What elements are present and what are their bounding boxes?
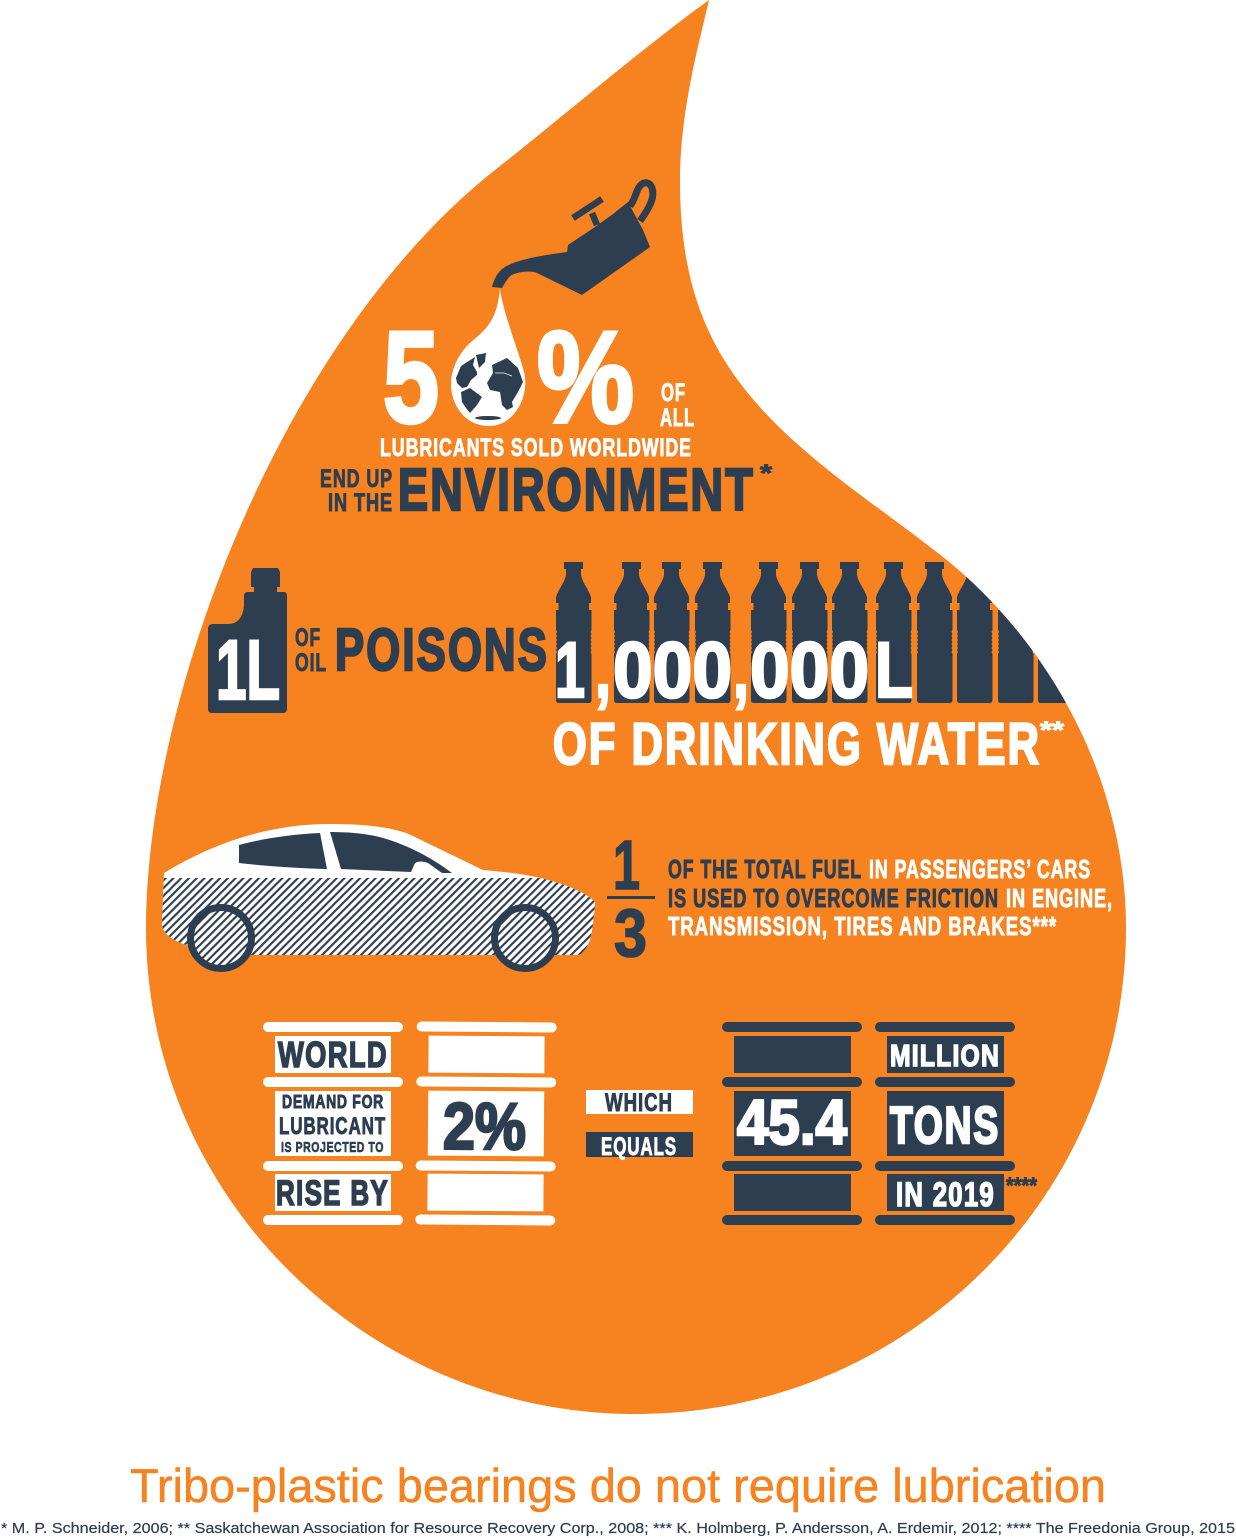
references footnote: * M. P. Schneider, 2006; ** Saskatchewan Association for Resource Recovery Corp., 2008; *** K. Holmberg, P. Andersson, A. Erdemir, 2012; **** The Freedonia Group, 2015 [1, 1520, 1235, 1537]
end up in the: IN THE [328, 489, 393, 517]
barrel: world demand [263, 1022, 403, 1225]
one million litres: L [875, 625, 913, 714]
barrel: world demand: WORLD [278, 1034, 388, 1075]
barrel: world demand: DEMAND FOR [282, 1092, 384, 1112]
equals label: EQUALS [601, 1133, 677, 1161]
percent sign: % [537, 304, 634, 450]
fraction one third: 3 [614, 895, 647, 971]
of drinking water: OF DRINKING WATER [553, 712, 1041, 777]
poisons: POISONS [335, 617, 549, 683]
barrel: million tons in 2019: TONS [890, 1097, 1000, 1155]
barrel: two percent [415, 1022, 557, 1225]
fuel friction text: IS USED TO OVERCOME FRICTION [668, 883, 999, 913]
footnote mark: * [760, 460, 773, 487]
fuel friction text [668, 854, 1113, 941]
barrel: two percent: 2% [443, 1089, 526, 1163]
panel: lubricant demand barrels [263, 1022, 1037, 1225]
bottles row [556, 562, 1074, 703]
one million litres: 000 [613, 625, 732, 714]
one litre: 1L [216, 623, 280, 717]
of oil: OIL [295, 649, 327, 677]
panel: one third of fuel [150, 824, 1113, 971]
fraction one third: 1 [613, 826, 640, 904]
icon: car [150, 824, 610, 968]
of all: ALL [660, 404, 695, 432]
icon: oil jug [208, 568, 287, 713]
fuel friction text: TRANSMISSION, TIRES AND BRAKES*** [668, 911, 1057, 941]
number five: 5 [383, 304, 439, 450]
barrel: 45.4: 45.4 [737, 1088, 847, 1158]
one million litres: 000 [750, 625, 869, 714]
barrel: world demand: LUBRICANT [279, 1113, 386, 1140]
barrel: world demand: RISE BY [276, 1174, 389, 1213]
one million litres: , [595, 625, 611, 714]
of all: OF [661, 379, 686, 407]
fraction one third [607, 826, 655, 971]
one million litres: 1 [555, 625, 585, 714]
end up in the [320, 465, 393, 517]
one million litres [555, 625, 913, 714]
fuel friction text: OF THE TOTAL FUEL [668, 854, 862, 884]
of oil: OF [295, 624, 321, 652]
of all [660, 379, 695, 432]
end up in the: END UP [320, 465, 393, 493]
icon: white drop with globe [451, 288, 525, 426]
environment: ENVIRONMENT [398, 457, 755, 523]
icon: oil can [492, 183, 653, 295]
lubricants sold worldwide: LUBRICANTS SOLD WORLDWIDE [380, 434, 692, 462]
which label: WHICH [605, 1089, 673, 1117]
fuel friction text: IN ENGINE, [1006, 883, 1113, 913]
barrel: million tons in 2019 [875, 1022, 1037, 1225]
barrel: world demand: IS PROJECTED TO [281, 1139, 384, 1156]
one million litres: , [733, 625, 749, 714]
of oil [295, 624, 327, 677]
fuel friction text: IN PASSENGERS’ CARS [869, 854, 1091, 884]
orange oil drop background [146, 0, 1126, 1414]
panel: one litre poisons a million [208, 562, 1074, 777]
barrel: million tons in 2019: IN 2019 [896, 1176, 995, 1214]
barrel: million tons in 2019: **** [1006, 1173, 1037, 1198]
panel: 50 percent statistic [320, 183, 773, 523]
barrel: 45.4 [722, 1022, 862, 1225]
barrel: million tons in 2019: MILLION [890, 1038, 1000, 1073]
tagline: Tribo-plastic bearings do not require lubrication [130, 1459, 1106, 1512]
footnote mark: ** [1040, 717, 1065, 744]
